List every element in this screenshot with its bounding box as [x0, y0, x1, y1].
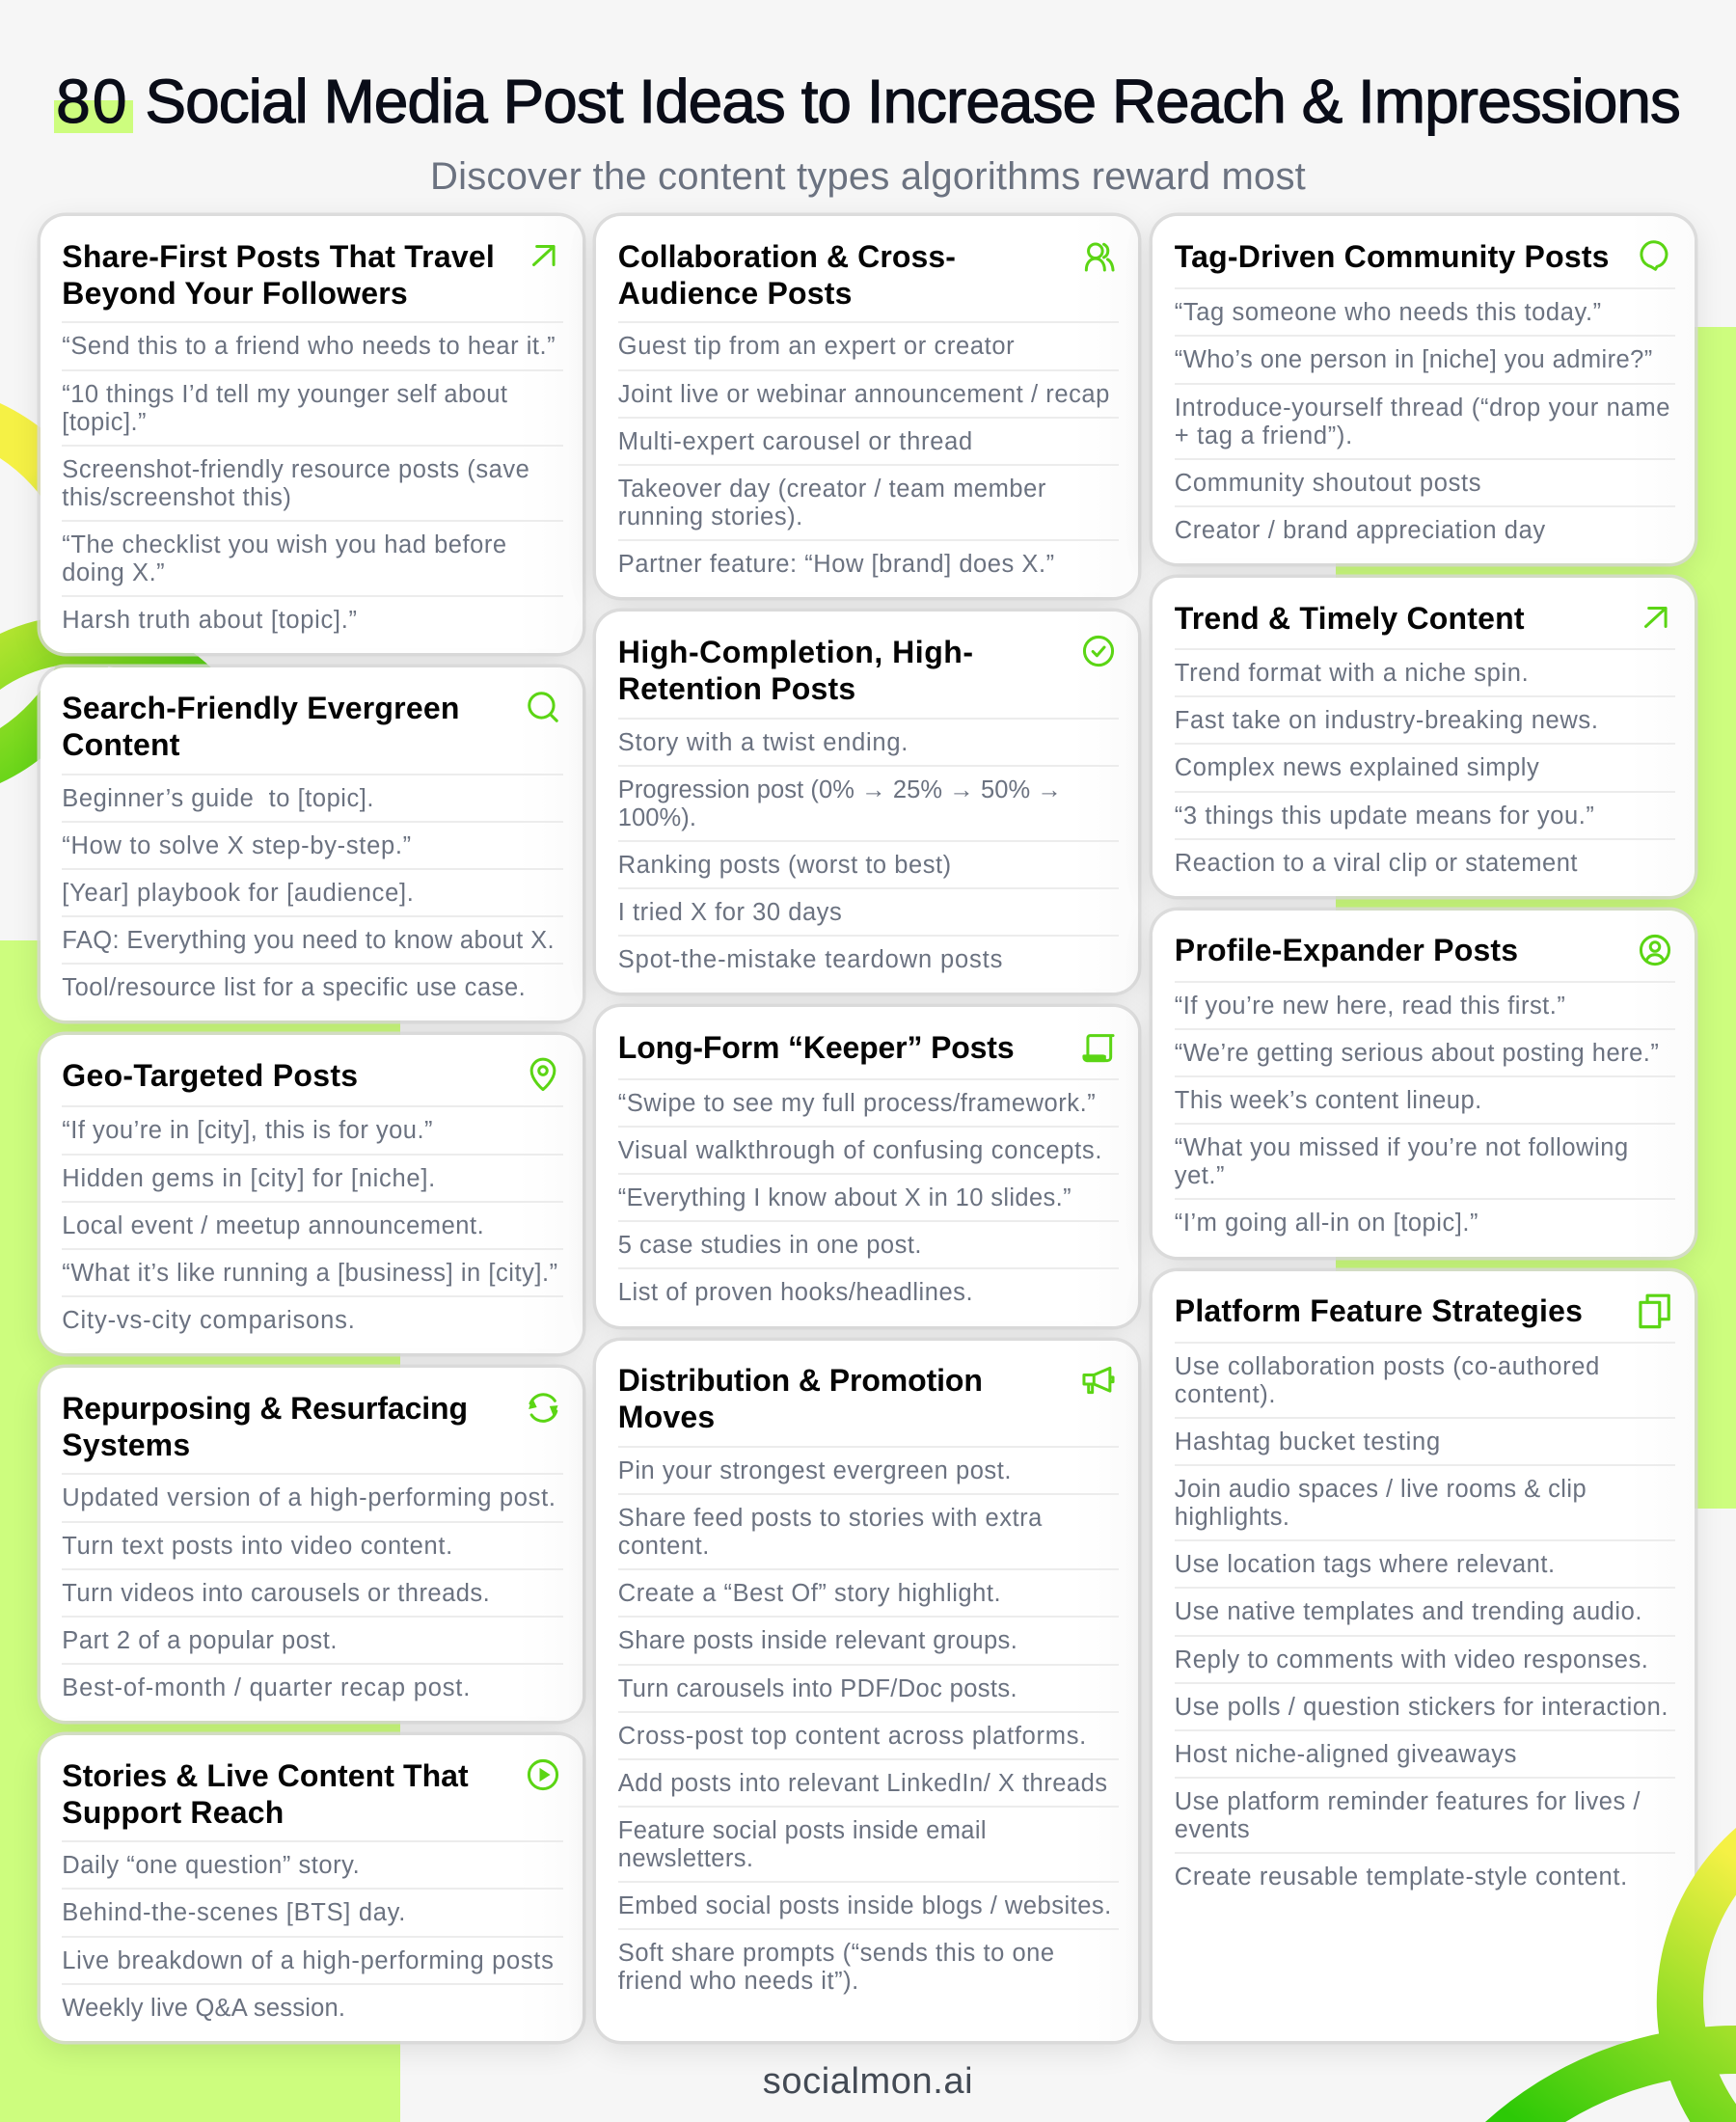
- idea list: “If you’re in [city], this is for you.”: [62, 1117, 433, 1144]
- idea list: Use polls / question stickers for interaction.: [1175, 1694, 1668, 1721]
- idea list: Community shoutout posts: [1175, 470, 1481, 497]
- panel: long-form keeper posts: [596, 1007, 1138, 1326]
- icon: message bubble: [1640, 240, 1668, 271]
- idea list: running stories).: [618, 503, 803, 530]
- idea list: “Everything I know about X in 10 slides.”: [618, 1184, 1071, 1211]
- idea list: Cross-post top content across platforms.: [618, 1723, 1087, 1750]
- idea list: newsletters.: [618, 1845, 753, 1872]
- idea list: Share feed posts to stories with extra: [618, 1505, 1043, 1532]
- idea list: [1175, 1342, 1675, 1899]
- idea list: City-vs-city comparisons.: [62, 1307, 356, 1334]
- idea list: doing X.”: [62, 559, 165, 586]
- idea list: Use native templates and trending audio.: [1175, 1598, 1642, 1625]
- heading: [618, 239, 956, 311]
- heading: Share-First Posts That Travel: [62, 239, 495, 274]
- idea list: content.: [618, 1533, 710, 1560]
- idea list: Ranking posts (worst to best): [618, 852, 952, 879]
- idea list: Create a “Best Of” story highlight.: [618, 1580, 1001, 1607]
- heading: Collaboration & Cross-: [618, 239, 956, 274]
- idea list: [62, 774, 563, 1001]
- heading: [62, 239, 495, 311]
- idea list: [617, 1078, 1119, 1306]
- heading: Retention Posts: [618, 671, 855, 706]
- idea list: Use collaboration posts (co-authored: [1175, 1353, 1600, 1380]
- panel: stories and live content: [41, 1735, 583, 2041]
- heading: [62, 1757, 469, 1829]
- idea list: Use platform reminder features for lives /: [1175, 1788, 1641, 1815]
- heading: Long-Form “Keeper” Posts: [618, 1030, 1014, 1065]
- idea list: Screenshot-friendly resource posts (save: [62, 456, 529, 483]
- idea list: Turn carousels into PDF/Doc posts.: [618, 1675, 1017, 1702]
- idea list: This week’s content lineup.: [1175, 1087, 1482, 1114]
- icon: megaphone: [1082, 1366, 1115, 1395]
- idea list: friend who needs it”).: [618, 1968, 859, 1995]
- idea list: Add posts into relevant LinkedIn/ X threads: [618, 1770, 1108, 1797]
- idea list: Use location tags where relevant.: [1175, 1551, 1556, 1578]
- idea list: Feature social posts inside email: [618, 1817, 987, 1844]
- card header: [618, 1030, 1115, 1065]
- idea list: Join audio spaces / live rooms & clip: [1175, 1476, 1587, 1503]
- idea list: Joint live or webinar announcement / recap: [618, 381, 1110, 408]
- idea list: “10 things I’d tell my younger self about: [62, 381, 507, 408]
- idea list: [1175, 981, 1675, 1246]
- card header: [1175, 911, 1675, 981]
- idea list: [62, 1840, 563, 2022]
- icon: arrow up right: [532, 245, 556, 266]
- idea list: [62, 1105, 563, 1334]
- idea list: “3 things this update means for you.”: [1175, 803, 1595, 830]
- heading: Systems: [62, 1428, 190, 1462]
- idea list: Embed social posts inside blogs / websites.: [618, 1892, 1112, 1919]
- idea list: Hashtag bucket testing: [1175, 1428, 1441, 1455]
- heading: Repurposing & Resurfacing: [62, 1391, 468, 1426]
- heading: Beyond Your Followers: [62, 276, 408, 311]
- idea list: “I’m going all-in on [topic].”: [1175, 1210, 1478, 1237]
- icon: play: [527, 1759, 559, 1790]
- card header: [62, 1391, 557, 1462]
- idea list: “What you missed if you’re not following: [1175, 1134, 1629, 1161]
- idea list: Share posts inside relevant groups.: [618, 1627, 1017, 1654]
- idea list: content).: [1175, 1381, 1276, 1408]
- idea list: List of proven hooks/headlines.: [618, 1279, 973, 1306]
- idea list: Takeover day (creator / team member: [618, 476, 1046, 503]
- idea list: Tool/resource list for a specific use case.: [62, 974, 526, 1001]
- idea list: Soft share prompts (“sends this to one: [618, 1940, 1055, 1967]
- idea list: yet.”: [1175, 1162, 1225, 1189]
- heading: Distribution & Promotion: [618, 1363, 983, 1398]
- idea list: I tried X for 30 days: [618, 899, 842, 926]
- icon: copy: [1637, 1292, 1673, 1329]
- background block: lime right: [1336, 327, 1736, 1509]
- column 2: [588, 212, 1146, 2056]
- idea list: [618, 321, 1119, 578]
- idea list: Harsh truth about [topic].”: [62, 607, 358, 634]
- idea list: Pin your strongest evergreen post.: [618, 1457, 1012, 1484]
- idea list: Best-of-month / quarter recap post.: [62, 1674, 471, 1701]
- card header: [62, 1757, 559, 1829]
- panel: share-first posts: [41, 216, 583, 653]
- idea list: Live breakdown of a high-performing posts: [62, 1947, 555, 1974]
- title: 80 Social Media Post Ideas to Increase Reach & Impressions: [56, 67, 1680, 136]
- idea list: [Year] playbook for [audience].: [62, 880, 415, 907]
- idea list: Introduce-yourself thread (“drop your name: [1175, 394, 1670, 422]
- icon: users: [1084, 243, 1115, 272]
- panel: collaboration and cross-audience: [596, 216, 1138, 597]
- idea list: Weekly live Q&A session.: [62, 1995, 345, 2022]
- card header: [1175, 578, 1675, 648]
- icon: map pin: [530, 1057, 556, 1092]
- icon: user circle: [1637, 932, 1673, 968]
- idea list: [62, 321, 563, 634]
- idea list: [1175, 648, 1675, 885]
- card header: [1175, 239, 1668, 274]
- idea list: “How to solve X step-by-step.”: [62, 832, 412, 859]
- footer brand: socialmon.ai: [763, 2061, 973, 2102]
- idea list: [topic].”: [62, 409, 147, 436]
- column 1: [33, 212, 590, 2056]
- idea list: + tag a friend”).: [1175, 422, 1353, 449]
- icon: arrow up right: [1637, 599, 1673, 636]
- idea list: “We’re getting serious about posting here.”: [1175, 1040, 1659, 1067]
- heading: High-Completion, High-: [618, 635, 974, 669]
- idea list: Story with a twist ending.: [618, 729, 909, 756]
- panel: geo-targeted posts: [41, 1035, 583, 1353]
- idea list: Updated version of a high-performing post.: [62, 1484, 556, 1511]
- idea list: Part 2 of a popular post.: [62, 1627, 338, 1654]
- panel: profile-expander posts: [1153, 911, 1695, 1257]
- heading: Profile-Expander Posts: [1175, 933, 1518, 967]
- heading: Content: [62, 727, 180, 762]
- column 3: [1146, 212, 1701, 2056]
- icon: check circle: [1082, 635, 1115, 667]
- idea list: Turn text posts into video content.: [62, 1533, 453, 1560]
- idea list: [1175, 287, 1675, 553]
- idea list: [618, 718, 1119, 973]
- idea list: Progression post (0% → 25% → 50% →: [618, 776, 1062, 803]
- idea list: Spot-the-mistake teardown posts: [618, 946, 1003, 973]
- idea list: Visual walkthrough of confusing concepts.: [618, 1137, 1102, 1164]
- card header: [618, 239, 1115, 311]
- heading: Geo-Targeted Posts: [62, 1058, 358, 1093]
- idea list: Trend format with a niche spin.: [1175, 660, 1529, 687]
- idea list: this/screenshot this): [62, 484, 291, 511]
- panel: high-completion high-retention: [596, 612, 1138, 993]
- idea list: [617, 1446, 1119, 1995]
- idea list: Reaction to a viral clip or statement: [1175, 850, 1578, 877]
- idea list: Partner feature: “How [brand] does X.”: [618, 551, 1055, 578]
- heading: Stories & Live Content That: [62, 1757, 469, 1792]
- idea list: “Tag someone who needs this today.”: [1175, 299, 1602, 326]
- icon: scroll: [1082, 1034, 1115, 1063]
- heading: Platform Feature Strategies: [1175, 1293, 1583, 1328]
- card header: [618, 1363, 1115, 1434]
- idea list: FAQ: Everything you need to know about X.: [62, 927, 555, 954]
- idea list: Reply to comments with video responses.: [1175, 1646, 1648, 1673]
- icon: refresh: [529, 1393, 557, 1423]
- panel: platform feature strategies: [1153, 1271, 1695, 2041]
- card header: [618, 635, 1115, 706]
- subtitle: Discover the content types algorithms reward most: [430, 155, 1306, 198]
- idea list: 100%).: [618, 804, 696, 831]
- heading: [618, 635, 974, 706]
- idea list: Beginner’s guide to [topic].: [62, 785, 374, 812]
- idea list: events: [1175, 1816, 1250, 1843]
- background block: lime left: [0, 940, 400, 2122]
- idea list: “Who’s one person in [niche] you admire?”: [1175, 346, 1653, 373]
- idea list: Host niche-aligned giveaways: [1175, 1741, 1517, 1768]
- idea list: “What it’s like running a [business] in [city].”: [62, 1260, 558, 1287]
- idea list: 5 case studies in one post.: [618, 1232, 922, 1259]
- panel: repurposing and resurfacing: [41, 1368, 583, 1721]
- heading: [62, 1391, 468, 1462]
- card header: [62, 239, 556, 311]
- idea list: “The checklist you wish you had before: [62, 531, 507, 558]
- panel: search-friendly evergreen: [41, 667, 583, 1020]
- panel: trend and timely content: [1153, 578, 1695, 896]
- idea list: “Send this to a friend who needs to hear it.”: [62, 333, 556, 360]
- heading: [62, 691, 460, 762]
- idea list: “Swipe to see my full process/framework.”: [618, 1090, 1096, 1117]
- idea list: “If you’re new here, read this first.”: [1175, 993, 1565, 1020]
- icon: search: [528, 692, 558, 722]
- card header: [1175, 1271, 1675, 1342]
- idea list: Complex news explained simply: [1175, 754, 1539, 781]
- heading: Trend & Timely Content: [1175, 601, 1525, 636]
- heading: Search-Friendly Evergreen: [62, 691, 460, 725]
- idea list: Turn videos into carousels or threads.: [62, 1580, 490, 1607]
- card header: [62, 691, 558, 762]
- idea list: Guest tip from an expert or creator: [618, 333, 1015, 360]
- panel: distribution and promotion: [596, 1341, 1138, 2041]
- card header: [62, 1057, 556, 1093]
- idea list: highlights.: [1175, 1504, 1289, 1531]
- idea list: [62, 1473, 563, 1701]
- heading: [618, 1363, 983, 1434]
- idea list: Multi-expert carousel or thread: [618, 428, 973, 455]
- idea list: Hidden gems in [city] for [niche].: [62, 1165, 436, 1192]
- idea list: Fast take on industry-breaking news.: [1175, 707, 1599, 734]
- idea list: Local event / meetup announcement.: [62, 1212, 484, 1239]
- idea list: Create reusable template-style content.: [1175, 1864, 1628, 1891]
- heading: Support Reach: [62, 1794, 284, 1829]
- idea list: Daily “one question” story.: [62, 1852, 360, 1879]
- panel: tag-driven community: [1153, 216, 1695, 563]
- idea list: Behind-the-scenes [BTS] day.: [62, 1899, 406, 1926]
- heading: Audience Posts: [618, 276, 853, 311]
- heading: Tag-Driven Community Posts: [1175, 239, 1610, 274]
- heading: Moves: [618, 1400, 715, 1434]
- idea list: Creator / brand appreciation day: [1175, 517, 1546, 544]
